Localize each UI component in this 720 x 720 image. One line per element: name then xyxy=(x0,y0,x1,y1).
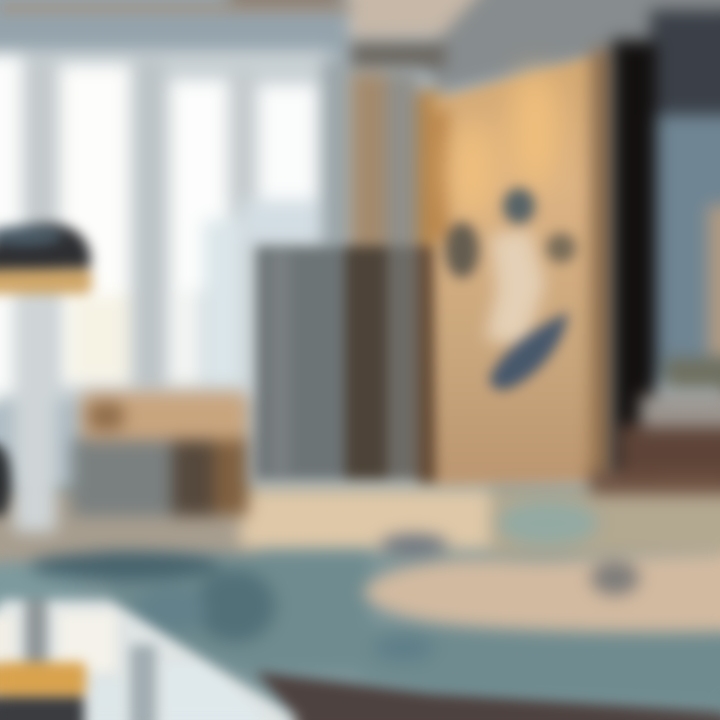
middle pillar xyxy=(350,72,442,260)
floor lamp xyxy=(0,224,92,532)
panel leaf motifs xyxy=(445,188,576,390)
ceiling xyxy=(0,0,720,92)
windows with curtains xyxy=(0,0,350,400)
floor xyxy=(0,472,720,720)
striped grey screen xyxy=(256,246,442,484)
rug xyxy=(0,501,720,708)
wooden panel xyxy=(432,50,610,486)
floor edge below rug xyxy=(255,672,720,720)
rug dark teal band xyxy=(30,552,275,642)
dark doorway and right room xyxy=(612,10,720,480)
rug cream circle xyxy=(363,552,720,632)
bed at right xyxy=(618,358,720,485)
armchair xyxy=(72,392,248,516)
rug motifs xyxy=(374,534,639,661)
panel pale centre xyxy=(485,230,545,345)
foreground table reflection xyxy=(0,600,300,720)
